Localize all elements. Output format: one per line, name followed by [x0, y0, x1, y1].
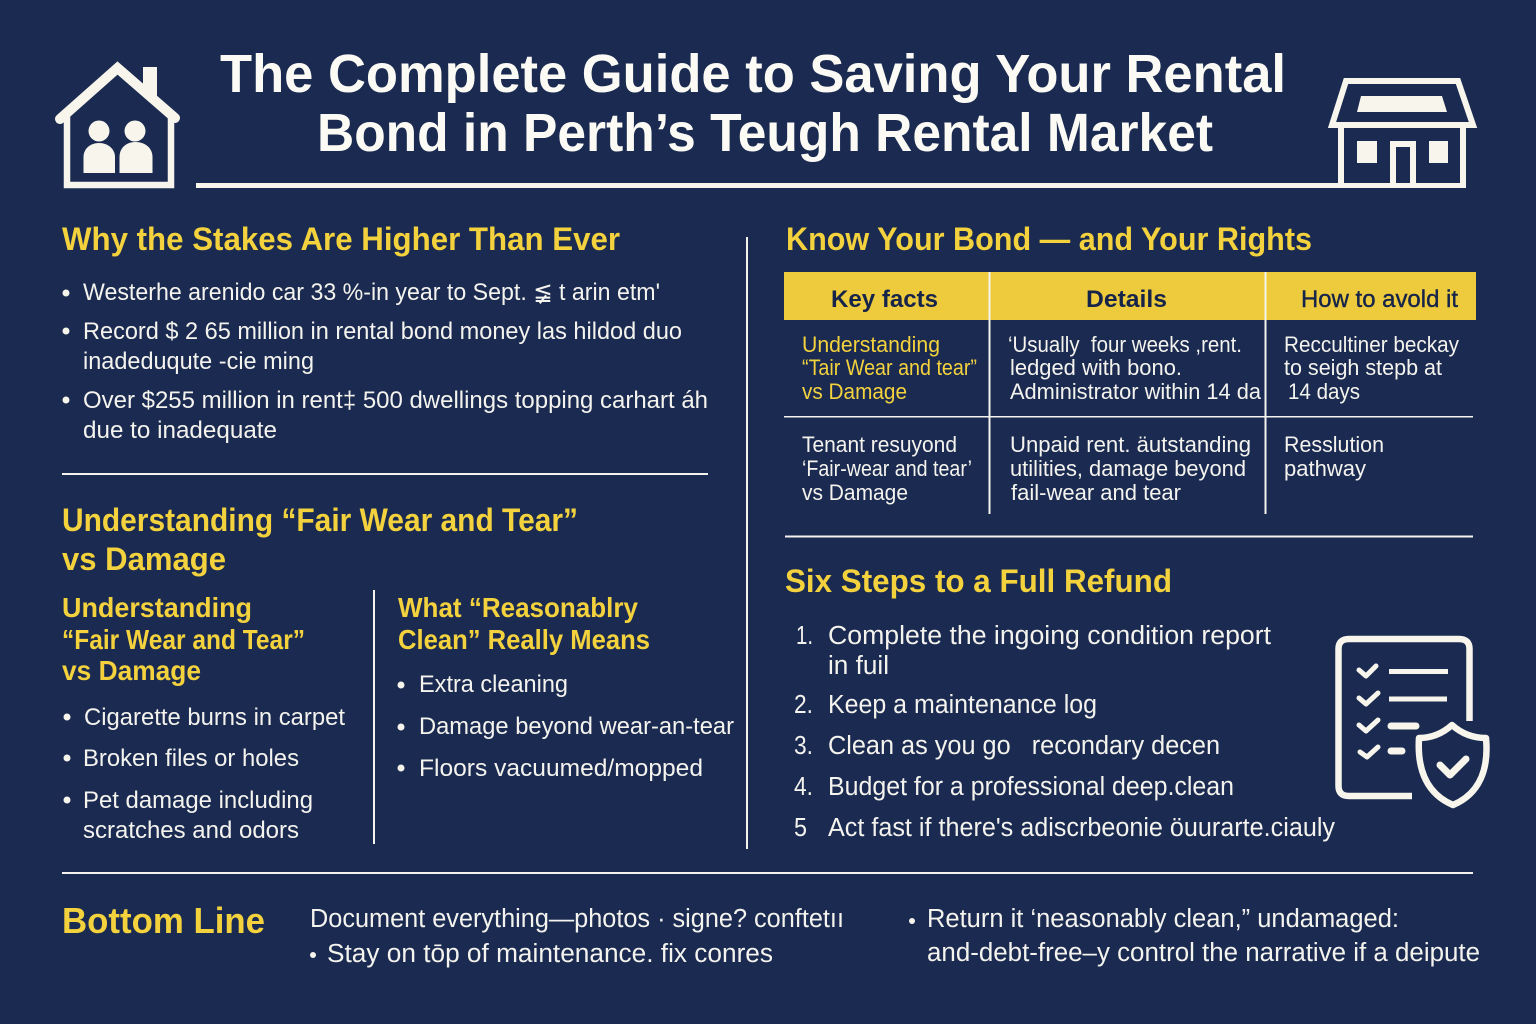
title: Bond in Perth’s Teugh Rental Market — [317, 103, 1213, 163]
text block: bottom line right: and-debt-free–y control the narrative if a deipute — [927, 939, 1480, 967]
bullet list: stakes: inadeduqute -cie ming — [83, 348, 314, 375]
bullet list: damage: Cigarette burns in carpet — [84, 704, 345, 731]
heading: stakes: Why the Stakes Are Higher Than Ever — [62, 221, 620, 257]
icon: house with two people — [60, 67, 175, 185]
bullet list: reasonably clean: Damage beyond wear-an-tear — [419, 713, 734, 740]
table row 1: “Tair Wear and tear” — [802, 355, 977, 380]
title — [220, 44, 1286, 163]
heading: bottom line: Bottom Line — [62, 900, 265, 941]
panel: understanding fair wear and tear — [62, 502, 578, 577]
text block: bottom line right: Return it ‘neasonably clean,” undamaged: — [927, 905, 1399, 933]
table row 1: ledged with bono. — [1010, 355, 1182, 380]
table row 2: pathway — [1284, 456, 1367, 481]
text block: bottom line left: Document everything—photos · signe? conftetıı — [310, 905, 844, 933]
table row 1: to seigh stepb at — [1284, 355, 1443, 380]
table row 2: ‘Fair-wear and tear’ — [802, 456, 972, 481]
bullet list: stakes — [62, 279, 708, 444]
table row 1 — [802, 332, 1460, 404]
subheading: reasonably clean — [398, 592, 650, 655]
table row 1: vs Damage — [802, 379, 907, 404]
subheading: damage — [62, 592, 305, 686]
numbered list: six steps: 2. — [794, 691, 813, 719]
table row 2: Resslution — [1284, 432, 1384, 457]
table: key facts — [784, 272, 1476, 514]
numbered list: six steps — [794, 622, 1335, 842]
numbered list: six steps: 4. — [794, 773, 813, 801]
table row 2: vs Damage — [802, 480, 908, 505]
table row 2: fail-wear and tear — [1011, 480, 1181, 505]
text block: bottom line right — [909, 905, 1480, 967]
bullet list: reasonably clean — [398, 671, 734, 782]
table row 1: Reccultiner beckay — [1284, 332, 1460, 357]
icon: checklist with shield — [1338, 639, 1487, 805]
table row 2: Unpaid rent. äutstanding — [1010, 432, 1251, 457]
table header: Details — [1086, 286, 1167, 313]
panel: why the stakes are higher — [62, 221, 708, 444]
subheading: reasonably clean: What “Reasonablry — [398, 592, 638, 623]
bullet list: stakes: Over $255 million in rent‡ 500 dwellings topping carhart áh — [83, 387, 708, 414]
bullet list: damage: scratches and odors — [83, 817, 299, 844]
panel: reasonably clean column — [398, 592, 734, 782]
icon: house with skylight — [1332, 81, 1473, 185]
table row 1: ‘Usually four weeks ,rent. — [1008, 332, 1242, 357]
numbered list: six steps: Act fast if there's adiscrbeonie öuurarte.ciauly — [828, 814, 1335, 842]
bullet list: damage: Broken files or holes — [83, 745, 299, 772]
bullet list: stakes: due to inadequate — [83, 417, 277, 444]
numbered list: six steps: 5 — [794, 814, 807, 842]
title underline — [196, 183, 1466, 188]
table header: How to avold it — [1301, 286, 1458, 313]
numbered list: six steps: in fuil — [828, 652, 889, 680]
table header: Key facts — [831, 286, 938, 313]
bullet list: damage — [64, 704, 345, 844]
subheading: damage: “Fair Wear and Tear” — [62, 624, 305, 655]
panel: understanding fair wear and tear: vs Damage — [62, 541, 226, 577]
panel: bottom line — [62, 900, 1480, 968]
title: The Complete Guide to Saving Your Rental — [220, 44, 1286, 104]
bullet list: stakes: Record $ 2 65 million in rental bond money las hildod duo — [83, 318, 682, 345]
bullet list: reasonably clean: Floors vacuumed/mopped — [419, 755, 703, 782]
heading: know your bond: Know Your Bond — and Your Rights — [786, 221, 1312, 257]
heading: fair wear and tear: Understanding “Fair Wear and Tear” — [62, 502, 578, 538]
table row 2: utilities, damage beyond — [1010, 456, 1246, 481]
table header — [784, 272, 1476, 320]
table row 1: 14 days — [1288, 379, 1360, 404]
text block: bottom line left: Stay on tōp of maintenance. fix conres — [327, 940, 773, 968]
subheading: damage: vs Damage — [62, 655, 201, 686]
numbered list: six steps: 1. — [796, 622, 813, 650]
bullet list: reasonably clean: Extra cleaning — [419, 671, 568, 698]
numbered list: six steps: 3. — [794, 732, 813, 760]
table row 2: Tenant resuyond — [802, 432, 957, 457]
numbered list: six steps: Budget for a professional deep.clean — [828, 773, 1234, 801]
bullet list: stakes: Westerhe arenido car 33 %-in year to Sept. ≨ t arin etm' — [83, 279, 660, 306]
table row 1: Administrator within 14 da — [1010, 379, 1261, 404]
numbered list: six steps: Keep a maintenance log — [828, 691, 1097, 719]
panel: damage column — [62, 592, 345, 844]
table row 2 — [802, 432, 1384, 505]
text block: bottom line left — [310, 905, 844, 968]
numbered list: six steps: Complete the ingoing condition report — [828, 622, 1271, 650]
subheading: damage: Understanding — [62, 592, 252, 623]
bullet list: damage: Pet damage including — [83, 787, 313, 814]
numbered list: six steps: Clean as you go recondary decen — [828, 732, 1220, 760]
heading: six steps: Six Steps to a Full Refund — [785, 563, 1172, 599]
subheading: reasonably clean: Clean” Really Means — [398, 624, 650, 655]
table row 1: Understanding — [802, 332, 940, 357]
